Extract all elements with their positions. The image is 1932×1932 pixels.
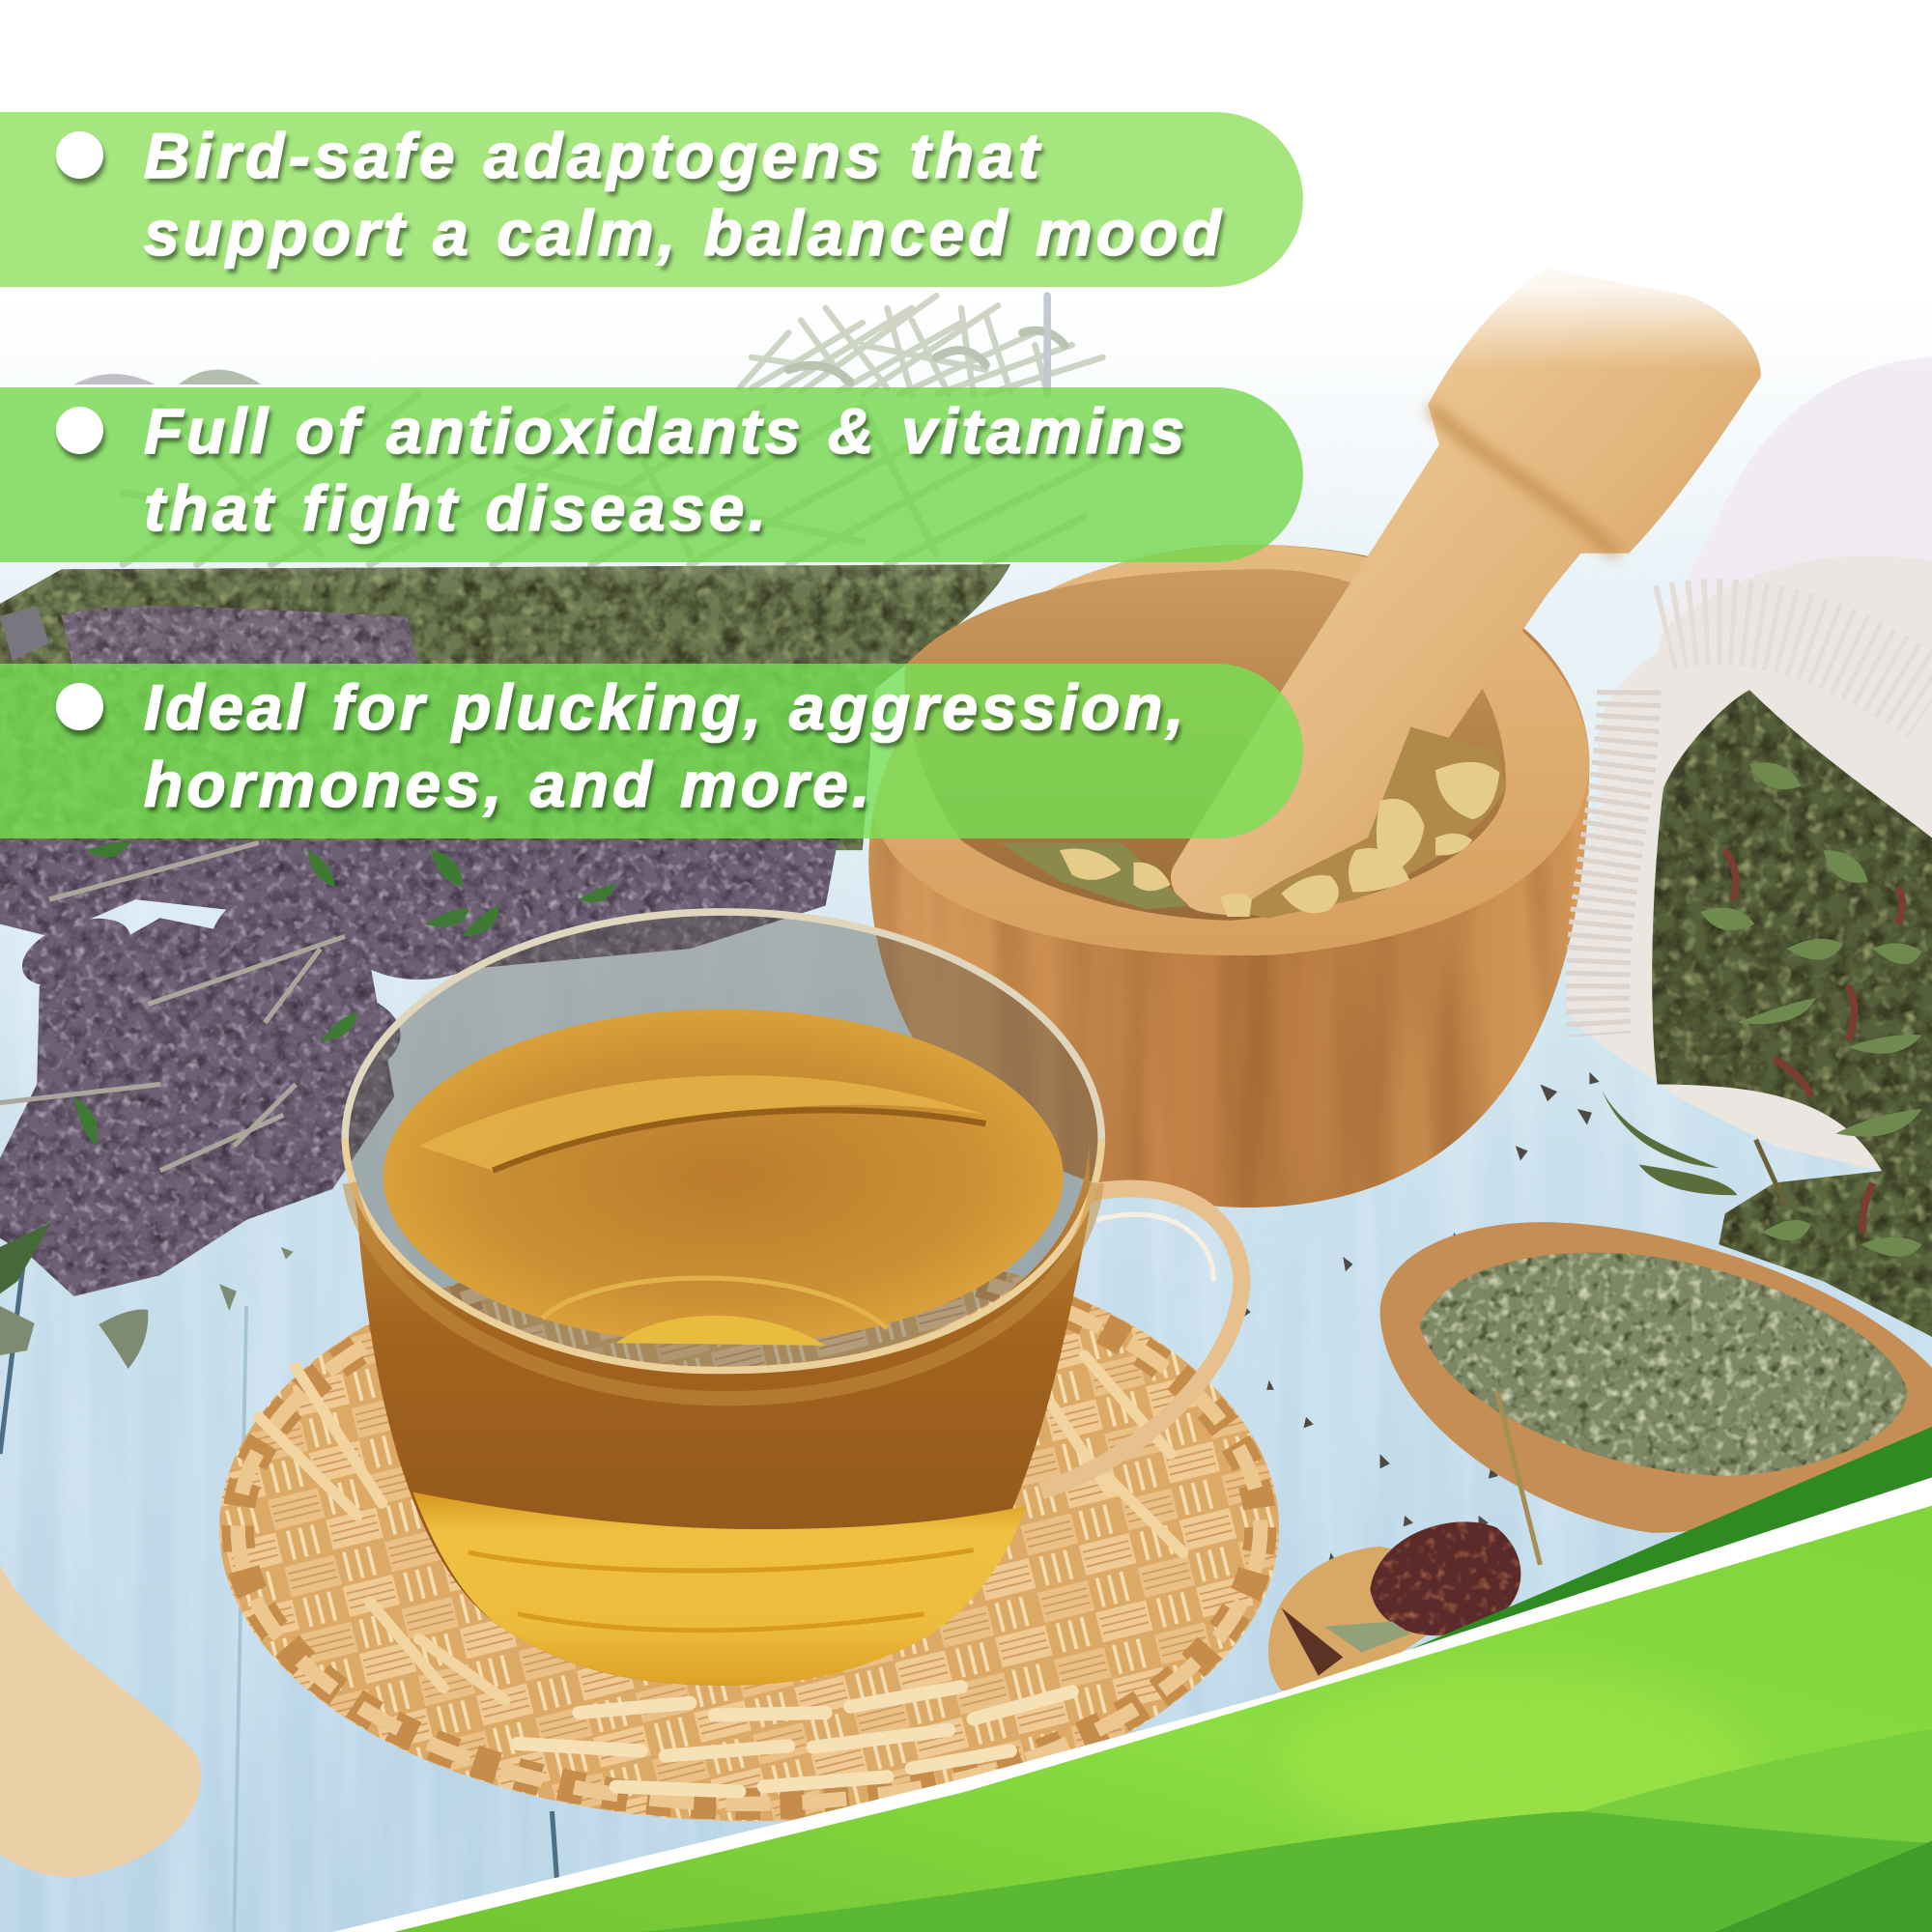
spoon of dried herbs xyxy=(1380,1222,1932,1533)
glass upper back xyxy=(344,911,1103,1369)
purple flowering herbs xyxy=(0,840,838,1369)
pill: plucking and aggression xyxy=(0,664,1303,838)
bullet xyxy=(56,407,103,454)
small spoon with dried flower xyxy=(1268,1392,1540,1690)
text block xyxy=(143,120,1227,276)
dark green wedge xyxy=(1314,1427,1932,1700)
glass tea cup xyxy=(344,911,1242,1686)
faded herbs at top of table xyxy=(74,296,1109,564)
herb bundle band behind mortar xyxy=(0,564,1010,850)
bullet xyxy=(56,683,103,730)
wooden spoon lower left xyxy=(0,1565,201,1877)
mortar rim xyxy=(872,545,1589,955)
text block xyxy=(144,671,1187,824)
mortar and pestle xyxy=(868,269,1761,1208)
text block: Full of antioxidants & vitamins xyxy=(144,395,1188,467)
text block: that fight disease. xyxy=(144,472,770,544)
mortar cavity xyxy=(905,569,1506,921)
woven mat xyxy=(219,1235,1279,1821)
text block: Ideal for plucking, aggression, xyxy=(144,671,1187,743)
mortar bowl body xyxy=(868,545,1589,1208)
sack ribbing xyxy=(1598,690,1629,1035)
faint herb imprint xyxy=(1282,1669,1749,1855)
pestle xyxy=(1171,269,1761,915)
bottom green banner xyxy=(332,1427,1932,1932)
cup handle xyxy=(1041,1188,1242,1491)
text block: support a calm, balanced mood xyxy=(144,197,1225,269)
petals in mortar xyxy=(1001,727,1506,918)
mid green swoosh xyxy=(640,1811,1932,1932)
loose sack leaves xyxy=(1700,762,1922,1257)
pill: antioxidants and vitamins xyxy=(0,387,1303,562)
text block: Bird-safe adaptogens that xyxy=(144,120,1043,191)
pill: bird-safe adaptogens xyxy=(0,112,1303,287)
golden lower tea xyxy=(412,1492,1026,1686)
herbs spilling from sack xyxy=(1652,690,1932,1182)
lace top of sack xyxy=(1658,357,1932,635)
cloth sack with herbs xyxy=(1567,357,1932,1337)
white fade at top of photo xyxy=(0,0,1932,591)
tea body xyxy=(345,1140,1090,1686)
lime band xyxy=(394,1506,1932,1932)
tea surface xyxy=(384,1009,1064,1345)
darkest corner xyxy=(1716,1841,1932,1932)
local fade on pestle top and lace xyxy=(1355,234,1932,370)
bullet xyxy=(56,131,103,179)
text block xyxy=(144,395,1188,551)
white stripe xyxy=(332,1477,1932,1932)
glass rim xyxy=(345,1140,1101,1370)
text block: hormones, and more. xyxy=(144,749,873,820)
